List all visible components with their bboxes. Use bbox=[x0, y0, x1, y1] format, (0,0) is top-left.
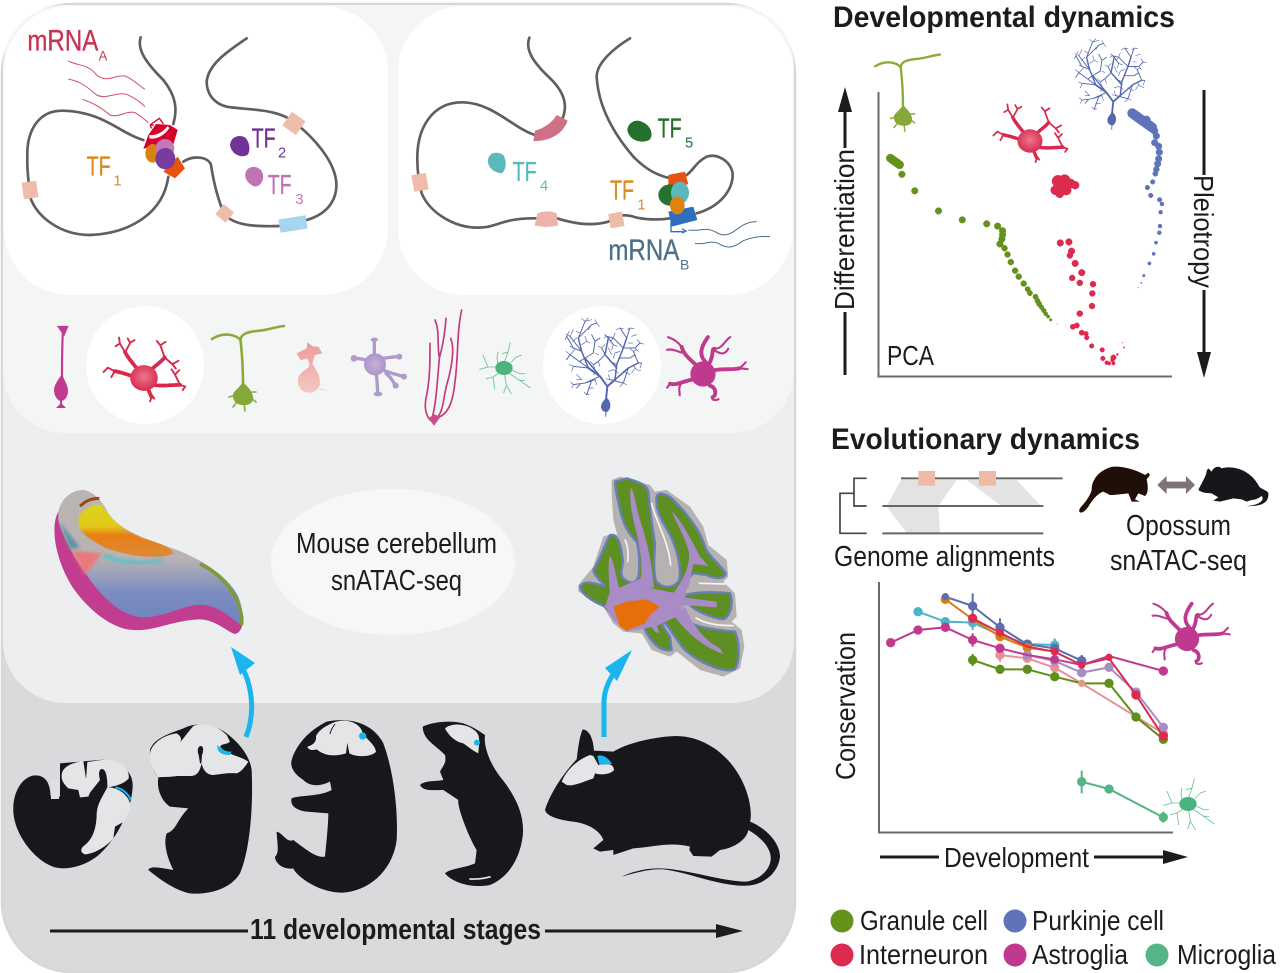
legend bbox=[830, 905, 1276, 970]
green edge bbox=[200, 564, 242, 625]
mRNA B wavy lines bbox=[688, 222, 770, 247]
legend: granule cell: Granule cell bbox=[860, 905, 988, 936]
label: TF3: TF bbox=[268, 169, 292, 200]
arrow: Development bbox=[880, 842, 1188, 873]
label line 1: Mouse cerebellum bbox=[296, 528, 497, 560]
label: Opossum: Opossum bbox=[1126, 510, 1231, 542]
label: subscript 3: 3 bbox=[295, 192, 303, 208]
orange nuclei bbox=[613, 599, 660, 631]
cerebellum 3D model bbox=[54, 490, 243, 634]
chart: PCA bbox=[875, 39, 1172, 376]
cell: purple stellate bbox=[351, 338, 407, 396]
label: Genome alignments: Genome alignments bbox=[834, 541, 1055, 573]
label: subscript B: B bbox=[680, 256, 689, 272]
icon: double arrow bbox=[1157, 476, 1195, 494]
mRNA A wavy lines bbox=[68, 61, 148, 123]
cell: Purkinje bbox=[565, 318, 643, 416]
cell: granule bbox=[212, 326, 284, 411]
label: mRNA B: mRNA bbox=[608, 234, 680, 267]
TF4 blob bbox=[488, 153, 506, 173]
series: microglia bbox=[1078, 771, 1167, 823]
icon: opossum bbox=[1079, 467, 1150, 513]
mouse: adult bbox=[545, 729, 780, 886]
gradient surface bbox=[58, 490, 242, 625]
icon: granule cell bbox=[875, 55, 940, 131]
promoter and TF complex bbox=[658, 172, 697, 233]
label: TF1: TF bbox=[87, 151, 111, 182]
green granule layer with blue edge bbox=[580, 478, 739, 670]
mouse: stage 2 bbox=[148, 724, 252, 894]
legend: astroglia: Astroglia bbox=[1032, 939, 1128, 970]
ellipse label: Mouse cerebellum snATAC-seq bbox=[271, 489, 515, 635]
chromatin line bbox=[27, 37, 336, 235]
panel: left background stack bbox=[2, 4, 795, 972]
icon: mouse bbox=[1198, 467, 1269, 506]
magenta base bbox=[54, 512, 243, 634]
label: Conservation: Conservation bbox=[830, 632, 861, 780]
mouse: stage 4 bbox=[420, 722, 523, 886]
label: subscript 1: 1 bbox=[637, 197, 645, 213]
label: subscript 1: 1 bbox=[113, 173, 121, 189]
legend: Purkinje cell: Purkinje cell bbox=[1032, 905, 1164, 936]
teal arc bbox=[103, 555, 162, 563]
chart: conservation over development bbox=[830, 582, 1230, 832]
TF3 blob bbox=[245, 167, 263, 186]
label: TF2: TF bbox=[252, 122, 276, 153]
arrow: 11 developmental stages bbox=[50, 914, 743, 946]
gray outer layer bbox=[578, 477, 744, 677]
label: mRNA A: mRNA bbox=[27, 25, 99, 58]
cerebellum section bbox=[578, 477, 744, 677]
points: granule trajectory bbox=[890, 158, 1057, 324]
teal wedge bbox=[59, 522, 80, 549]
label: PCA: PCA bbox=[887, 340, 934, 371]
highlight circle: Purkinje bbox=[543, 306, 661, 424]
arrow: to section bbox=[604, 650, 632, 737]
series: pink bbox=[996, 648, 1167, 737]
opossum vs mouse bbox=[1079, 467, 1269, 577]
icon: Purkinje cell bbox=[1074, 39, 1146, 129]
label line 2: snATAC-seq bbox=[331, 565, 462, 597]
panel: cell types row bbox=[54, 306, 748, 426]
legend: interneuron: Interneuron bbox=[859, 939, 988, 970]
icon: microglia bbox=[1164, 779, 1214, 830]
brown arc bbox=[75, 498, 99, 523]
chromatin line bbox=[417, 38, 733, 228]
cell: pink neuron bbox=[297, 342, 327, 393]
cell: interneuron bbox=[104, 338, 185, 401]
purple white matter bbox=[605, 488, 723, 654]
series: teal bbox=[914, 608, 1058, 649]
heading: Evolutionary dynamics: Evolutionary dynamics bbox=[831, 423, 1140, 456]
TF5 blob bbox=[627, 121, 652, 142]
points: interneuron trajectory bbox=[1051, 175, 1125, 365]
series group bbox=[887, 593, 1167, 823]
arrow: Differentiation bbox=[829, 87, 860, 375]
heading: Developmental dynamics: Developmental dynamics bbox=[833, 1, 1175, 34]
cell: astroglia bbox=[667, 337, 748, 400]
series: blue bbox=[945, 593, 1085, 667]
series: red bbox=[969, 615, 1167, 740]
label: subscript 4: 4 bbox=[540, 179, 548, 195]
series: light purple bbox=[1024, 651, 1167, 731]
arrow: to 3D model bbox=[231, 647, 255, 737]
label: Development bbox=[944, 842, 1089, 873]
enhancer sites bbox=[22, 112, 308, 233]
genome alignment diagram bbox=[840, 471, 1063, 533]
developmental stage mice bbox=[13, 720, 397, 894]
mice: later stages bbox=[420, 722, 780, 886]
arrow: Pleiotropy bbox=[1188, 90, 1219, 378]
label: subscript 2: 2 bbox=[278, 145, 286, 161]
label: Pleiotropy bbox=[1188, 175, 1219, 288]
cell: radial glia bbox=[425, 310, 462, 426]
label: subscript 5: 5 bbox=[685, 135, 693, 151]
cell: microglia bbox=[480, 343, 530, 394]
panel: enhancer TF1 mRNA B bbox=[411, 38, 770, 272]
icon: astroglia bbox=[1153, 604, 1230, 664]
aligned regions bbox=[887, 480, 1040, 533]
label: Differentiation bbox=[829, 149, 860, 310]
enhancer sites bbox=[411, 115, 624, 228]
conserved elements bbox=[918, 471, 996, 486]
label: subscript A: A bbox=[99, 47, 108, 63]
cell: bipolar bbox=[54, 327, 68, 408]
icon: interneuron bbox=[993, 104, 1067, 162]
label: snATAC-seq: snATAC-seq bbox=[1110, 545, 1247, 577]
label: TF5: TF bbox=[658, 112, 682, 143]
label: 11 developmental stages bbox=[250, 914, 541, 946]
mouse: stage 1 bbox=[13, 759, 133, 868]
series: orange bbox=[942, 596, 1055, 652]
panel: enhancer TF1 mRNA A bbox=[22, 25, 336, 235]
white fissures bbox=[625, 503, 733, 626]
axes bbox=[879, 582, 1173, 832]
yellow-orange zone bbox=[78, 505, 173, 557]
points: Purkinje trajectory bbox=[1132, 113, 1164, 288]
PCA axes bbox=[878, 92, 1172, 376]
genome lines bbox=[882, 478, 1063, 533]
series: astroglia bbox=[887, 624, 1167, 675]
TF2 blob bbox=[230, 136, 249, 156]
label: TF4: TF bbox=[513, 156, 537, 187]
series: green bbox=[969, 654, 1167, 743]
mouse: stage 3 bbox=[275, 720, 397, 893]
phylogeny tree bbox=[840, 478, 867, 533]
label: TF1: TF bbox=[610, 174, 634, 205]
highlight circle: interneuron bbox=[86, 306, 204, 424]
pink wedge bbox=[72, 551, 102, 575]
promoter and TF complex bbox=[143, 118, 185, 178]
